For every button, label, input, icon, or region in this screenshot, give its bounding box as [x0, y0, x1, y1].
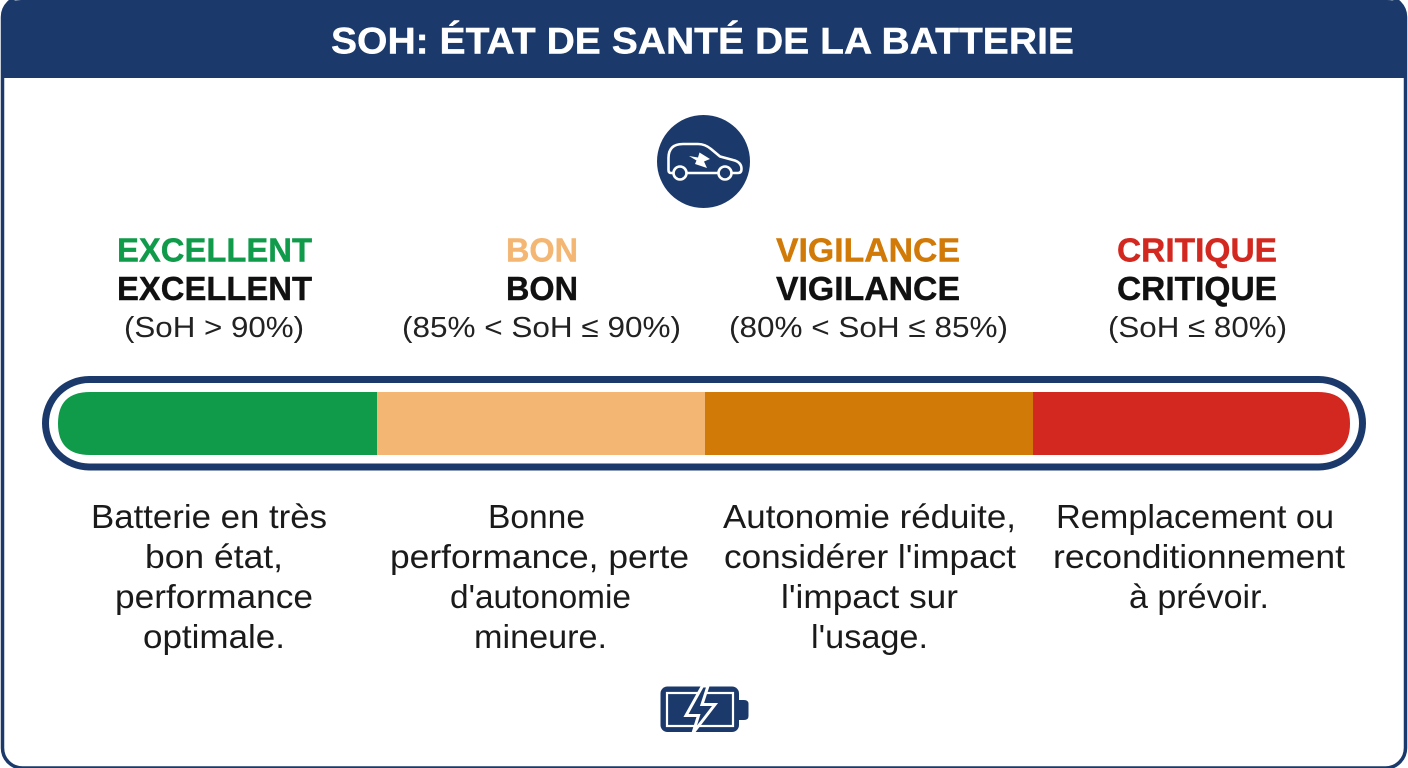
- title: SOH: ÉTAT DE SANTÉ DE LA BATTERIE: [331, 20, 1074, 62]
- status: critique: CRITIQUE: [1117, 270, 1277, 307]
- status: vigilance: [729, 232, 1008, 344]
- description: excellent: bon état,: [145, 538, 283, 575]
- description: bon: mineure.: [474, 618, 607, 655]
- status: critique: (SoH ≤ 80%): [1108, 312, 1287, 344]
- status: critique: [1108, 232, 1287, 344]
- icon: battery: [660, 686, 748, 733]
- status: bon: [402, 232, 681, 344]
- header banner: [1, 0, 1407, 78]
- description: bon: [390, 498, 689, 655]
- description: bon: performance, perte: [390, 538, 689, 575]
- description: vigilance: [723, 498, 1016, 655]
- status: vigilance: VIGILANCE: [776, 232, 960, 268]
- description: vigilance: considérer l'impact: [724, 538, 1016, 575]
- description: excellent: [91, 498, 327, 655]
- status: bon: BON: [506, 270, 578, 307]
- status: vigilance: VIGILANCE: [776, 270, 960, 307]
- status: excellent: EXCELLENT: [117, 270, 312, 307]
- description: vigilance: Autonomie réduite,: [723, 498, 1016, 535]
- description: critique: [1053, 498, 1345, 615]
- description: excellent: performance: [115, 578, 313, 615]
- status: excellent: [117, 232, 312, 344]
- status: critique: CRITIQUE: [1117, 232, 1277, 268]
- status: vigilance: (80% < SoH ≤ 85%): [729, 312, 1008, 344]
- status: bon: BON: [506, 232, 578, 268]
- description: critique: à prévoir.: [1129, 578, 1269, 615]
- description: bon: d'autonomie: [450, 578, 631, 615]
- description: critique: Remplacement ou: [1056, 498, 1334, 535]
- status: bon: (85% < SoH ≤ 90%): [402, 312, 681, 344]
- status: excellent: EXCELLENT: [117, 232, 312, 268]
- status: excellent: (SoH > 90%): [124, 312, 304, 344]
- state of health gauge bar: [46, 380, 1362, 467]
- description: vigilance: l'usage.: [811, 618, 928, 655]
- icon: electric car: [657, 115, 750, 208]
- description: critique: reconditionnement: [1053, 538, 1345, 575]
- description: bon: Bonne: [488, 498, 585, 535]
- description: excellent: Batterie en très: [91, 498, 327, 535]
- description: excellent: optimale.: [143, 618, 285, 655]
- description: vigilance: l'impact sur: [781, 578, 958, 615]
